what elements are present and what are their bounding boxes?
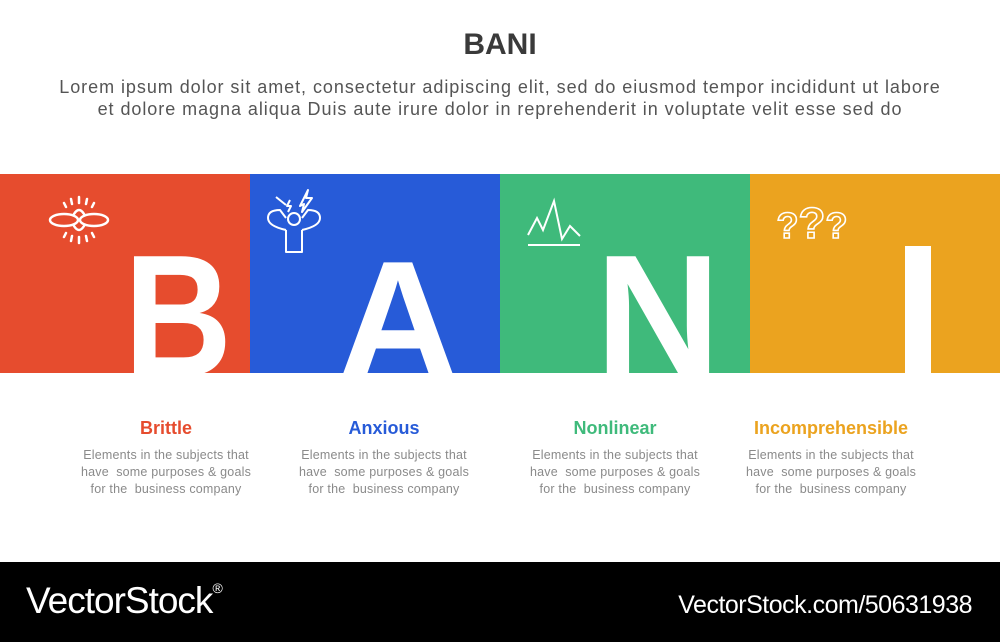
column: Incomprehensible: have some purposes & goals bbox=[746, 465, 916, 479]
panel: I bbox=[750, 174, 1000, 373]
panel: A bbox=[250, 174, 500, 373]
column: Brittle bbox=[81, 418, 251, 496]
column: Nonlinear: Elements in the subjects that bbox=[532, 448, 698, 462]
subtitle text: Lorem ipsum dolor sit amet, consectetur adipiscing elit, sed do eiusmod tempor incididunt ut labore bbox=[59, 77, 941, 97]
subtitle text: et dolore magna aliqua Duis aute irure dolor in reprehenderit in voluptate velit esse sed do bbox=[98, 99, 902, 119]
column: Incomprehensible bbox=[746, 418, 916, 496]
subtitle text bbox=[59, 77, 941, 119]
column: Nonlinear: Nonlinear bbox=[573, 418, 656, 438]
column: Anxious bbox=[299, 418, 469, 496]
icon: question marks: ??? bbox=[777, 199, 847, 248]
panel: B bbox=[0, 174, 250, 373]
panel: N bbox=[500, 174, 750, 373]
column: Brittle: Brittle bbox=[140, 418, 192, 438]
column: Anxious: Elements in the subjects that bbox=[301, 448, 467, 462]
column: Anxious: for the business company bbox=[309, 482, 459, 496]
title: BANI bbox=[463, 28, 537, 61]
column: Brittle: for the business company bbox=[91, 482, 241, 496]
letter banner bbox=[0, 174, 1000, 373]
column: Brittle: Elements in the subjects that bbox=[83, 448, 249, 462]
footer logo: VectorStock® bbox=[26, 580, 222, 621]
column: Incomprehensible: Incomprehensible bbox=[754, 418, 908, 438]
icon: nonlinear chart bbox=[528, 201, 580, 245]
column: Nonlinear: for the business company bbox=[540, 482, 690, 496]
column: Anxious: Anxious bbox=[348, 418, 420, 438]
column: Nonlinear: have some purposes & goals bbox=[530, 465, 700, 479]
column: Anxious: have some purposes & goals bbox=[299, 465, 469, 479]
footer id: VectorStock.com/50631938 bbox=[678, 591, 972, 619]
column: Brittle: have some purposes & goals bbox=[81, 465, 251, 479]
icon: anxious person bbox=[268, 190, 320, 252]
column: Nonlinear bbox=[530, 418, 700, 496]
column: Incomprehensible: Elements in the subjects that bbox=[748, 448, 914, 462]
column: Incomprehensible: for the business company bbox=[756, 482, 906, 496]
footer bar bbox=[0, 562, 1000, 642]
icon: broken chain bbox=[50, 197, 108, 243]
